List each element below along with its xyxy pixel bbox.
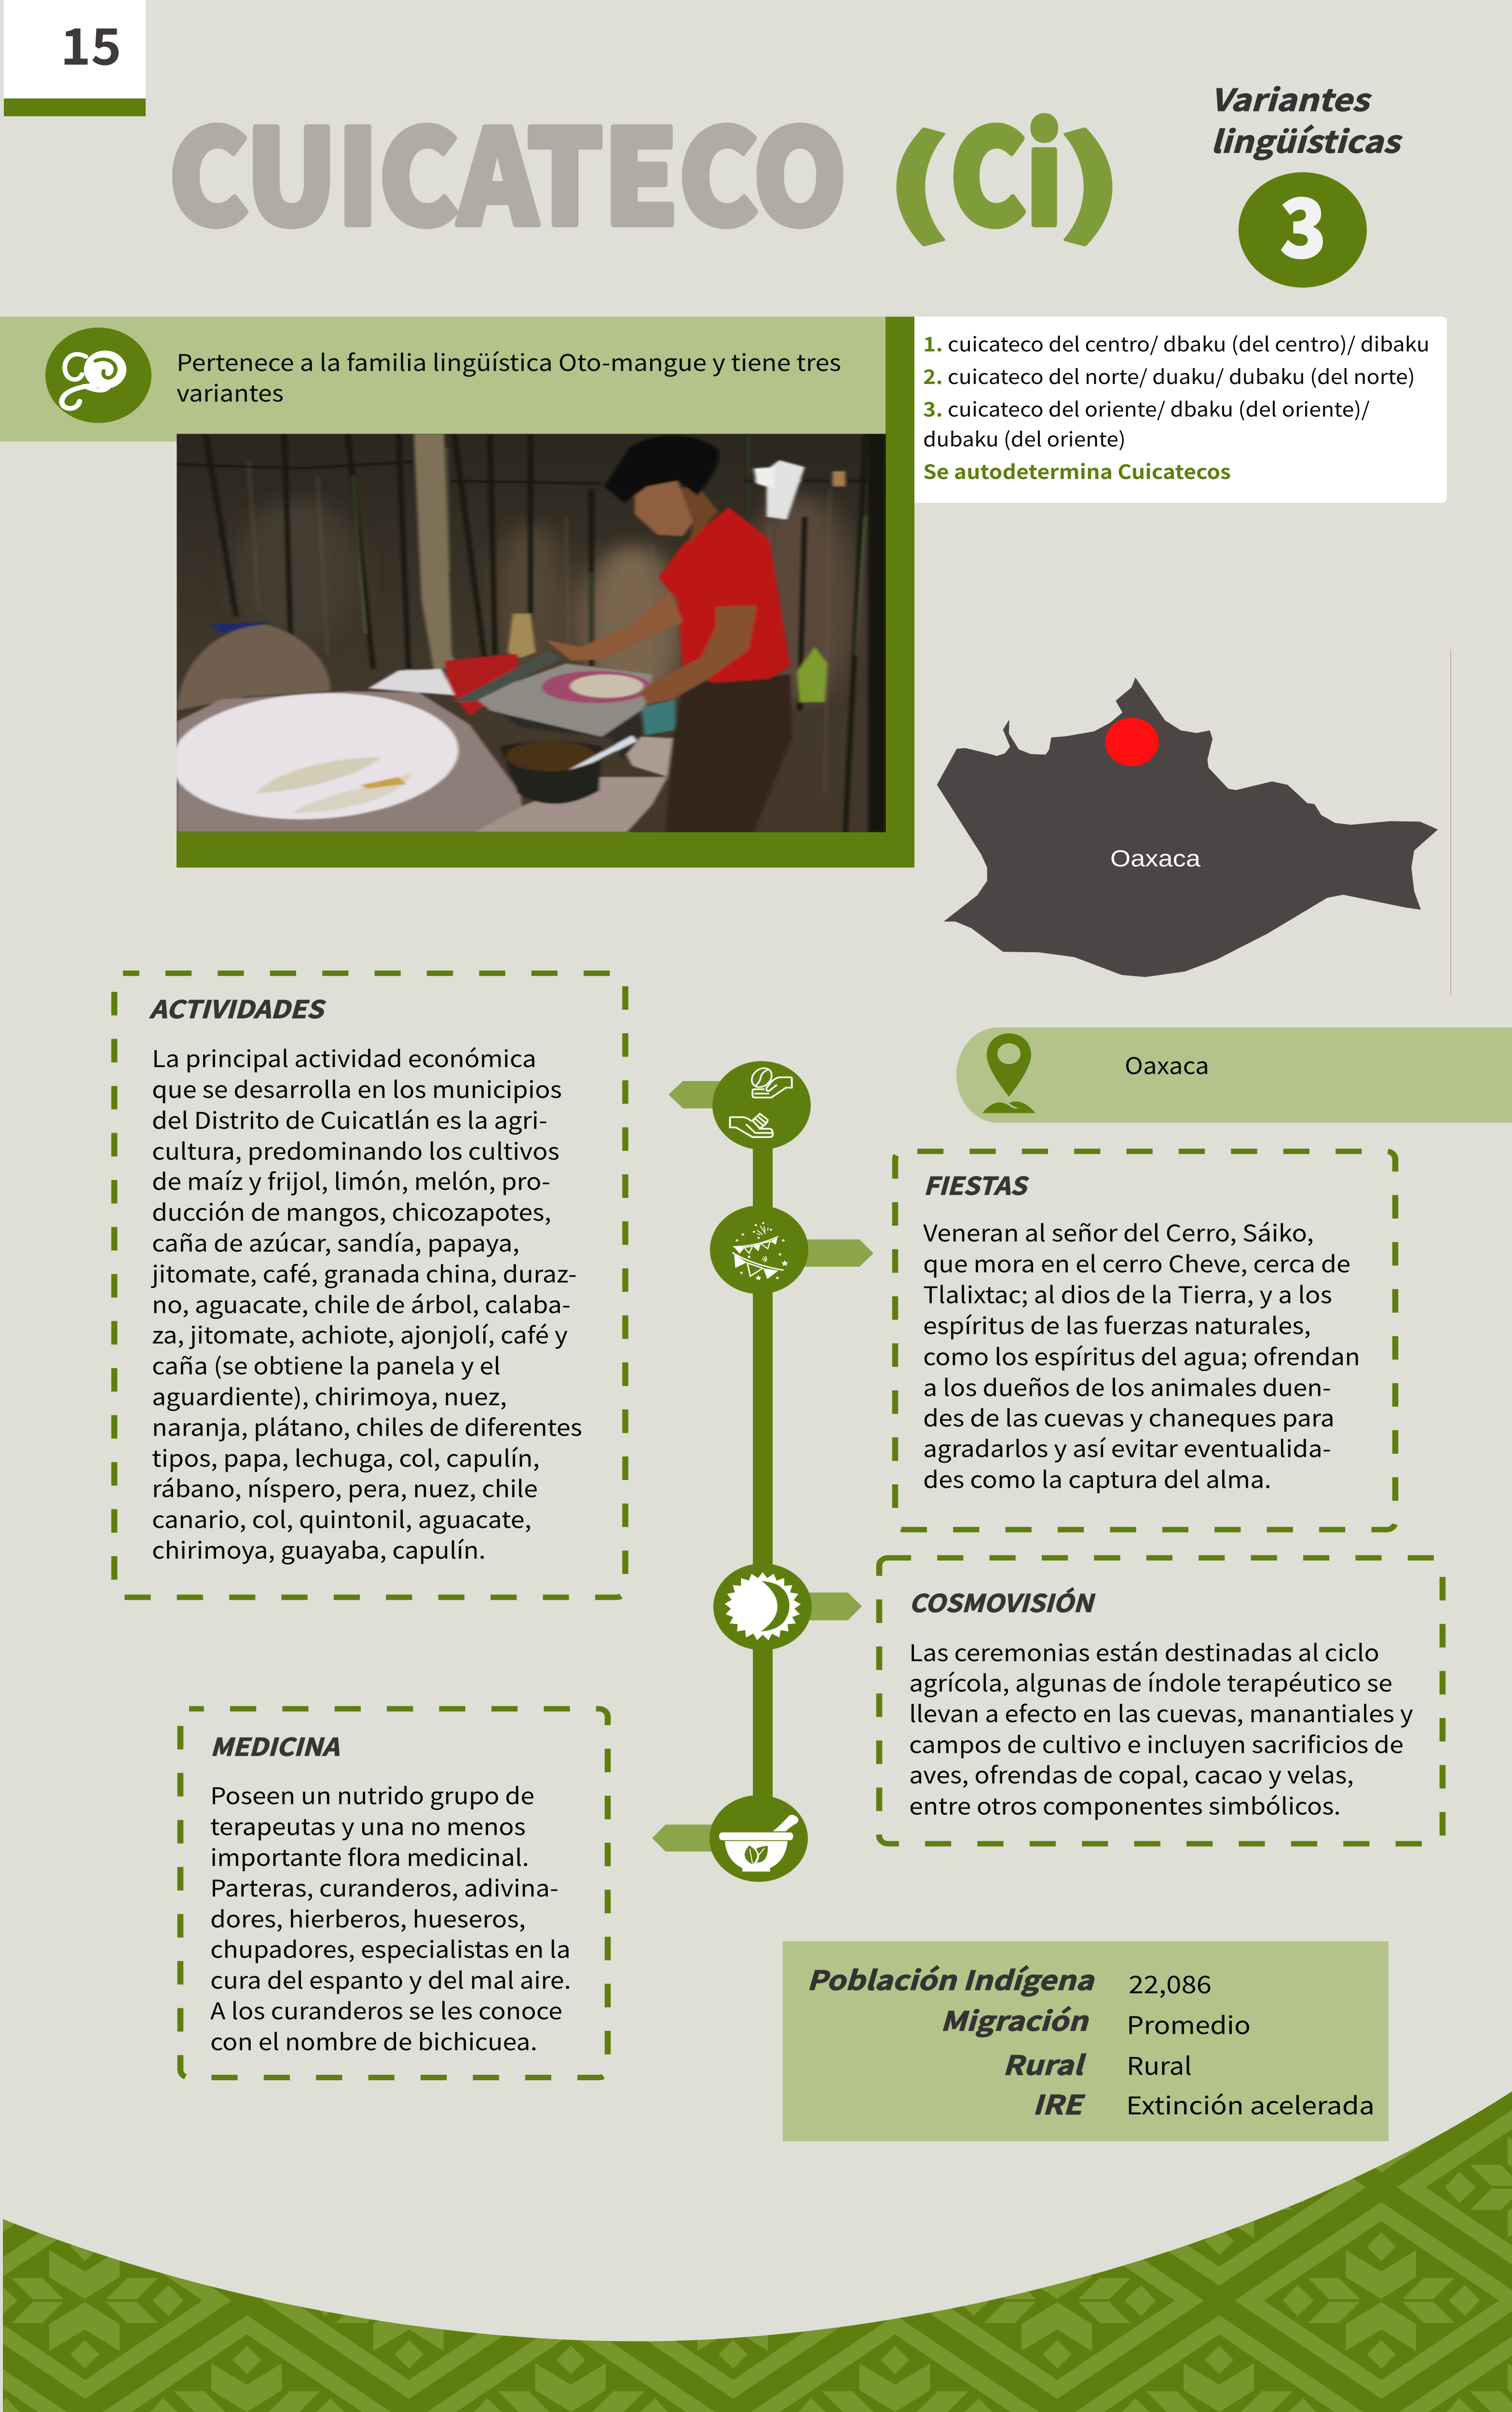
title: ( [885, 94, 953, 254]
text: fiestas body [923, 1215, 1360, 1495]
text: fiestas body: Veneran al señor del Cerro, Sáiko, [923, 1215, 1314, 1248]
page number tab [4, 0, 146, 116]
text: fiestas body: Tlalixtac; al dios de la Tierra, y a los [923, 1277, 1332, 1310]
text: actividades body: de maíz y frijol, limón, melón, pro- [152, 1164, 550, 1197]
title: ) [1056, 94, 1124, 254]
text: medicina body: con el nombre de bichicuea. [210, 2024, 537, 2057]
text: fiestas body: como los espíritus del agua; ofrendan [923, 1339, 1360, 1372]
text: medicina body: chupadores, especialistas en la [210, 1932, 571, 1965]
text: cosmovision body: llevan a efecto en las cuevas, manantiales y [909, 1696, 1413, 1729]
icon: hands and coffee beans [712, 1061, 811, 1150]
text: fiestas body: espíritus de las fuerzas naturales, [923, 1307, 1311, 1341]
text: actividades body: chirimoya, guayaba, capulín. [152, 1532, 486, 1565]
panel: statistics [783, 1941, 1389, 2141]
panel: statistics: Población Indígena [807, 1960, 1095, 1998]
family band: variantes [177, 375, 284, 409]
variants list panel: 2. cuicateco del norte/ duaku/ dubaku (del norte) [923, 361, 1415, 390]
panel: medicina [180, 1709, 608, 2078]
variants list panel: 3. cuicateco del oriente/ dbaku (del oriente)/ [923, 393, 1370, 423]
panel: statistics: Rural [1003, 2044, 1086, 2083]
panel: actividades [114, 973, 625, 1597]
text: cosmovision body: campos de cultivo e incluyen sacrificios de [909, 1727, 1403, 1760]
text: cosmovision body: aves, ofrendas de copal, cacao y velas, [909, 1757, 1354, 1790]
text: actividades body: no, aguacate, chile de árbol, calaba- [152, 1287, 571, 1320]
woven pattern footer [3, 2091, 1512, 2412]
text: actividades body: za, jitomate, achiote, ajonjolí, café y [152, 1317, 568, 1350]
text: fiestas body: a los dueños de los animales duen- [923, 1370, 1331, 1403]
text: actividades body: tipos, papa, lechuga, col, capulín, [152, 1440, 540, 1474]
location pill: Oaxaca [1125, 1048, 1209, 1081]
map of Oaxaca: Oaxaca [1110, 845, 1200, 871]
heading: fiestas: FIESTAS [924, 1167, 1029, 1202]
icon: mortar and leaves [709, 1795, 808, 1882]
text: actividades body: caña de azúcar, sandía, papaya, [152, 1225, 519, 1259]
text: actividades body: del Distrito de Cuicatlán es la agri- [152, 1102, 547, 1136]
text: actividades body: canario, col, quintonil, aguacate, [152, 1501, 531, 1535]
panel: statistics: Extinción acelerada [1126, 2086, 1375, 2122]
title: CUICATECO [169, 74, 847, 262]
icon: sun and moon [713, 1563, 812, 1650]
text: actividades body: La principal actividad económica [152, 1041, 536, 1074]
text: medicina body: importante flora medicinal. [210, 1839, 529, 1873]
map of Oaxaca [937, 678, 1438, 977]
arrow: cosmovision [791, 1592, 862, 1620]
text: medicina body: A los curanderos se les conoce [210, 1993, 562, 2026]
panel: statistics: Promedio [1127, 2006, 1251, 2042]
variantes count badge: 3 [1280, 164, 1326, 281]
text: fiestas body: que mora en el cerro Cheve, cerca de [923, 1246, 1350, 1279]
variants list panel [914, 316, 1447, 503]
title: Ci [950, 74, 1062, 262]
text: actividades body: naranja, plátano, chiles de diferentes [152, 1410, 582, 1443]
text: fiestas body: des como la captura del alma. [923, 1462, 1271, 1495]
text: actividades body: caña (se obtiene la panela y el [152, 1348, 501, 1381]
variants list panel: Se autodetermina Cuicatecos [923, 456, 1231, 485]
heading: actividades: ACTIVIDADES [149, 990, 326, 1026]
text: cosmovision body: agrícola, algunas de índole terapéutico se [909, 1665, 1392, 1698]
text: fiestas body: agradarlos y así evitar eventualida- [923, 1431, 1331, 1464]
variantes heading: Variantes [1211, 76, 1372, 120]
location pill [956, 1028, 1512, 1123]
page number tab: 15 [60, 6, 122, 79]
text: actividades body [150, 1041, 582, 1565]
panel: statistics: Migración [940, 2000, 1090, 2039]
family band: Pertenece a la familia lingüística Oto-mangue y tiene tres [177, 344, 841, 378]
icon: swirl [45, 328, 151, 423]
arrow: fiestas [791, 1239, 873, 1267]
arrow: actividades [668, 1081, 733, 1109]
variants list panel: 1. cuicateco del centro/ dbaku (del centro)/ dibaku [923, 328, 1430, 357]
variantes heading [1211, 76, 1403, 162]
panel: statistics: 22,086 [1129, 1966, 1212, 2001]
text: fiestas body: des de las cuevas y chaneques para [923, 1400, 1335, 1433]
text: actividades body: rábano, níspero, pera, nuez, chile [152, 1471, 538, 1504]
panel: statistics: Rural [1127, 2047, 1192, 2082]
text: actividades body: ducción de mangos, chicozapotes, [152, 1194, 551, 1228]
text: cosmovision body: Las ceremonias están destinadas al ciclo [909, 1634, 1379, 1668]
text: medicina body: dores, hierberos, hueseros, [210, 1901, 526, 1934]
text: actividades body: que se desarrolla en los municipios [152, 1071, 562, 1105]
variantes heading: lingüísticas [1211, 118, 1403, 162]
text: medicina body: terapeutas y una no menos [210, 1809, 526, 1842]
panel: statistics: IRE [1033, 2084, 1086, 2122]
text: actividades body: jitomate, café, granada china, duraz- [150, 1256, 577, 1289]
arrow: medicina [652, 1824, 723, 1851]
variantes count badge [1239, 164, 1367, 288]
panel: fiestas [895, 1151, 1395, 1530]
panel: cosmovision [879, 1558, 1443, 1844]
variants list panel: dubaku (del oriente) [923, 423, 1126, 452]
heading: cosmovision: COSMOVISIÓN [909, 1584, 1095, 1619]
text: medicina body: cura del espanto y del mal aire. [210, 1962, 571, 1995]
icon: festive bunting [710, 1206, 808, 1294]
text: actividades body: aguardiente), chirimoya, nuez, [152, 1379, 507, 1412]
heading: medicina: MEDICINA [210, 1728, 340, 1763]
text: cosmovision body [909, 1634, 1413, 1822]
text: medicina body: Poseen un nutrido grupo de [210, 1778, 534, 1811]
timeline spine [753, 1106, 773, 1839]
text: actividades body: cultura, predominando los cultivos [152, 1133, 559, 1166]
family band [0, 316, 885, 441]
photo frame [177, 316, 914, 868]
icon: map pin [982, 1033, 1035, 1113]
text: medicina body [210, 1778, 571, 2057]
text: medicina body: Parteras, curanderos, adivina- [210, 1870, 558, 1904]
photo: woman making tortillas [150, 434, 886, 834]
text: cosmovision body: entre otros componentes simbólicos. [909, 1788, 1341, 1822]
